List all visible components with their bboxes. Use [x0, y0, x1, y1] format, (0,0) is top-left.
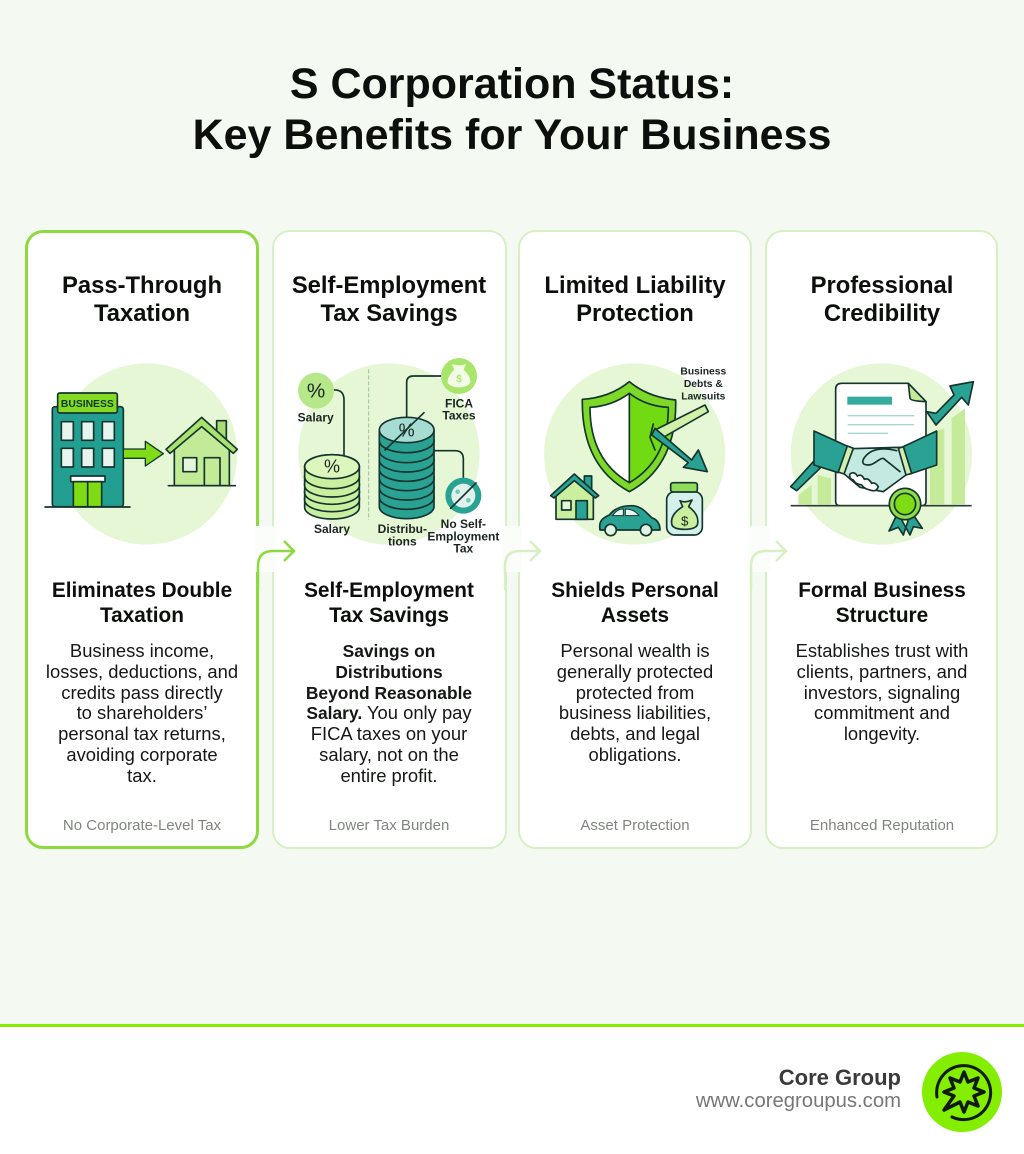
benefit subheading: Shields Personal [551, 579, 719, 602]
panel heading [811, 272, 953, 327]
benefit subheading: Self-Employment [304, 579, 474, 602]
arrow: card 1 to card 2 [256, 526, 296, 590]
benefit description: debts, and legal [570, 723, 700, 744]
panel: self-employment tax savings [272, 230, 507, 849]
benefit description [557, 640, 713, 765]
icon: shield protecting personal assets: $ [681, 514, 689, 529]
panel heading: Self-Employment [292, 272, 486, 299]
title: S Corporation Status: [290, 60, 734, 108]
panel: pass-through taxation [25, 230, 259, 849]
icon: salary and distribution stacks: tions [388, 535, 417, 549]
benefit subheading [304, 579, 474, 627]
icon: salary and distribution stacks: % [324, 457, 340, 477]
icon: salary and distribution stacks: % [307, 379, 325, 402]
icon: business income flowing to home: BUSINESS [61, 399, 114, 410]
icon: shield protecting personal assets: Business [680, 366, 727, 377]
icon: shield protecting personal assets: Debts & [684, 379, 723, 390]
icon: salary and distribution stacks: No Self- [441, 517, 486, 531]
benefit description [306, 641, 472, 786]
panel heading: Professional [811, 272, 953, 299]
icon: business income flowing to home [44, 363, 238, 545]
benefit description: Establishes trust with [796, 640, 968, 661]
panel heading [292, 272, 486, 327]
benefit description: longevity. [844, 723, 920, 744]
benefit description: FICA taxes on your [311, 723, 467, 744]
icon: salary and distribution stacks: Taxes [442, 409, 476, 423]
icon: handshake, document and growth chart [790, 363, 974, 545]
benefit subheading: Structure [836, 604, 928, 627]
panel: professional credibility [765, 230, 998, 849]
benefit description: Personal wealth is [560, 640, 710, 661]
footer tag: Asset Protection [580, 817, 690, 834]
icon: salary and distribution stacks [298, 358, 500, 556]
icon: salary and distribution stacks: % [399, 421, 415, 441]
benefit description: Business income, [70, 640, 214, 661]
icon: shield protecting personal assets [544, 363, 727, 545]
icon: salary and distribution stacks: Distribu- [378, 522, 427, 536]
benefit subheading [52, 579, 232, 627]
icon: salary and distribution stacks: Tax [453, 542, 474, 556]
benefit description: avoiding corporate [66, 744, 218, 765]
benefit subheading [798, 579, 966, 627]
icon: salary and distribution stacks: $ [456, 374, 462, 385]
benefit subheading: Tax Savings [329, 604, 449, 627]
benefit description [796, 640, 968, 744]
benefit description: credits pass directly [61, 682, 223, 703]
brand name: Core Group [779, 1065, 901, 1090]
panel heading: Pass-Through [62, 272, 222, 299]
benefit description: Beyond Reasonable [306, 683, 472, 703]
panel heading [62, 272, 222, 327]
benefit description: Savings on [343, 641, 435, 661]
benefit description: commitment and [814, 702, 950, 723]
icon: shield protecting personal assets: Lawsuits [681, 391, 726, 402]
icon: salary and distribution stacks: Employment [427, 529, 499, 543]
benefit description: losses, deductions, and [46, 661, 238, 682]
benefit description: to shareholders’ [77, 702, 207, 723]
benefit description: protected from [576, 682, 694, 703]
title [193, 60, 831, 159]
footer tag: Lower Tax Burden [329, 817, 449, 834]
title: Key Benefits for Your Business [193, 111, 831, 159]
benefit description: obligations. [588, 744, 682, 765]
panel heading: Limited Liability [544, 272, 726, 299]
benefit description: salary, not on the [319, 744, 459, 765]
benefit subheading: Assets [601, 604, 669, 627]
panel heading: Protection [576, 300, 694, 327]
panel heading: Credibility [824, 300, 940, 327]
footer tag: Enhanced Reputation [810, 817, 954, 834]
panel heading: Tax Savings [320, 300, 458, 327]
icon: salary and distribution stacks: Salary [298, 410, 334, 424]
footer band [0, 1024, 1024, 1154]
panel heading [544, 272, 726, 327]
icon: salary and distribution stacks: Salary [314, 522, 350, 536]
icon: salary and distribution stacks: FICA [445, 396, 473, 410]
benefit description: personal tax returns, [58, 723, 226, 744]
benefit subheading: Eliminates Double [52, 579, 232, 602]
website: www.coregroupus.com [696, 1090, 901, 1112]
benefit subheading: Taxation [100, 604, 184, 627]
panel: limited liability protection [518, 230, 752, 849]
arrow: card 2 to card 3 [504, 526, 542, 590]
benefit description: generally protected [557, 661, 713, 682]
benefit subheading: Formal Business [798, 579, 966, 602]
benefit description: entire profit. [340, 765, 438, 786]
benefit description: clients, partners, and [797, 661, 967, 682]
panel heading: Taxation [94, 300, 190, 327]
benefit description [46, 640, 238, 786]
benefit description: Distributions [335, 662, 443, 682]
footer tag: No Corporate-Level Tax [63, 817, 221, 834]
benefit description: Salary. You only pay [306, 702, 472, 723]
benefit description: business liabilities, [559, 702, 711, 723]
arrow: card 3 to card 4 [750, 526, 788, 590]
benefit subheading [551, 579, 719, 627]
icon: company logo [922, 1052, 1002, 1132]
benefit description: investors, signaling [804, 682, 960, 703]
benefit description: tax. [127, 765, 157, 786]
